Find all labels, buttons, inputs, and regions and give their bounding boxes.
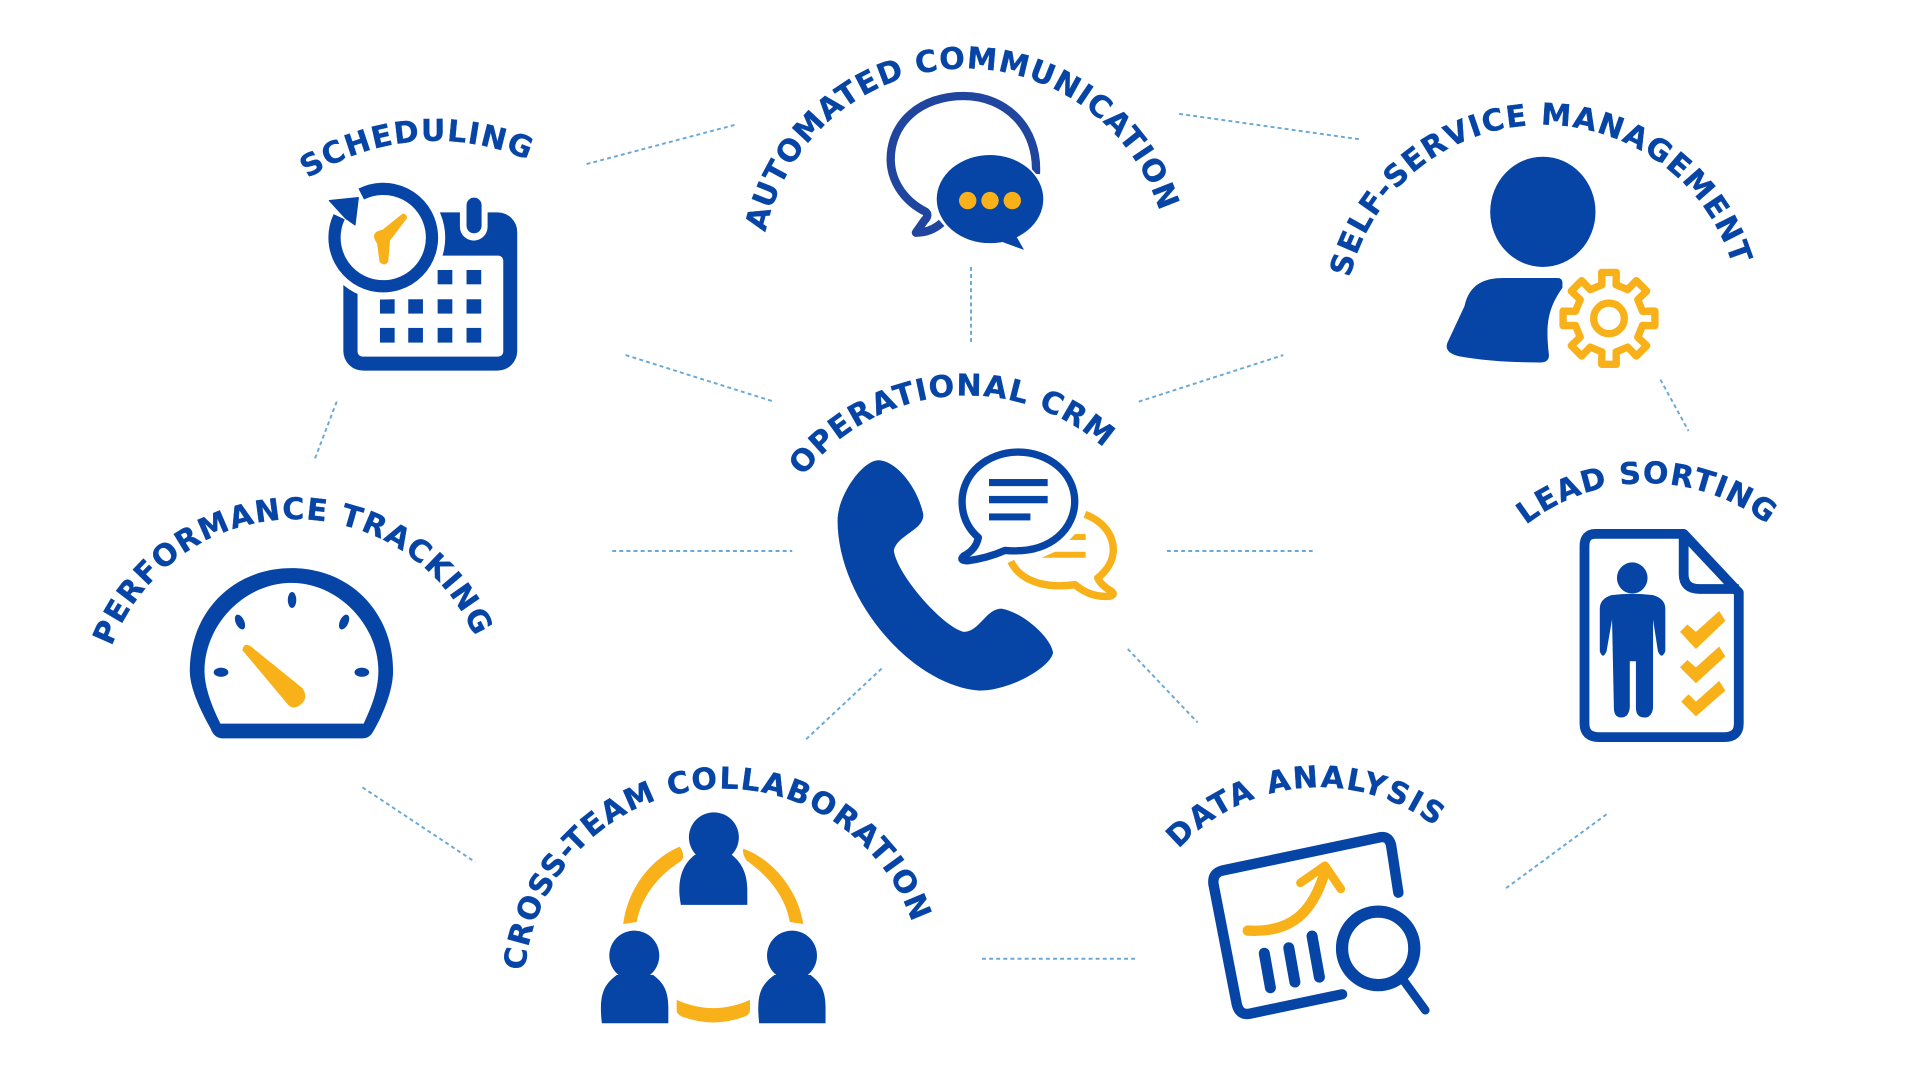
heading: self-service management: SELF-SERVICE MANAGEMENT: [1330, 102, 1754, 276]
heading: performance tracking: PERFORMANCE TRACKING: [92, 496, 492, 644]
heading: data analysis: DATA ANALYSIS: [1165, 765, 1444, 848]
panel: operational CRM: [791, 373, 1117, 691]
icon: chart with magnifier: [1213, 837, 1425, 1014]
icon: speedometer gauge: [190, 568, 393, 738]
heading: cross-team collaboration: CROSS-TEAM COLLABORATION: [504, 766, 932, 968]
heading: automated communication: AUTOMATED COMMUNICATION: [746, 46, 1180, 232]
icon: three people in a cycle: [601, 812, 826, 1023]
panel: scheduling: [300, 118, 533, 371]
panel: lead sorting: [1515, 460, 1777, 742]
heading: operational CRM: OPERATIONAL CRM: [791, 373, 1116, 472]
heading: scheduling: SCHEDULING: [300, 118, 533, 176]
icon: document with person and checks: [1584, 534, 1739, 737]
panel: performance tracking: [92, 496, 492, 738]
icon: speech bubbles: [891, 96, 1045, 250]
panel: automated communication: [746, 46, 1180, 250]
panel: data analysis: [1165, 765, 1444, 1020]
icon: phone with chat bubbles: [838, 452, 1113, 691]
panel: cross-team collaboration: [504, 766, 932, 1024]
panel: self-service management: [1330, 102, 1754, 368]
heading: lead sorting: LEAD SORTING: [1515, 460, 1777, 524]
icon: person with gear: [1447, 157, 1655, 364]
icon: calendar with clock: [321, 176, 517, 371]
